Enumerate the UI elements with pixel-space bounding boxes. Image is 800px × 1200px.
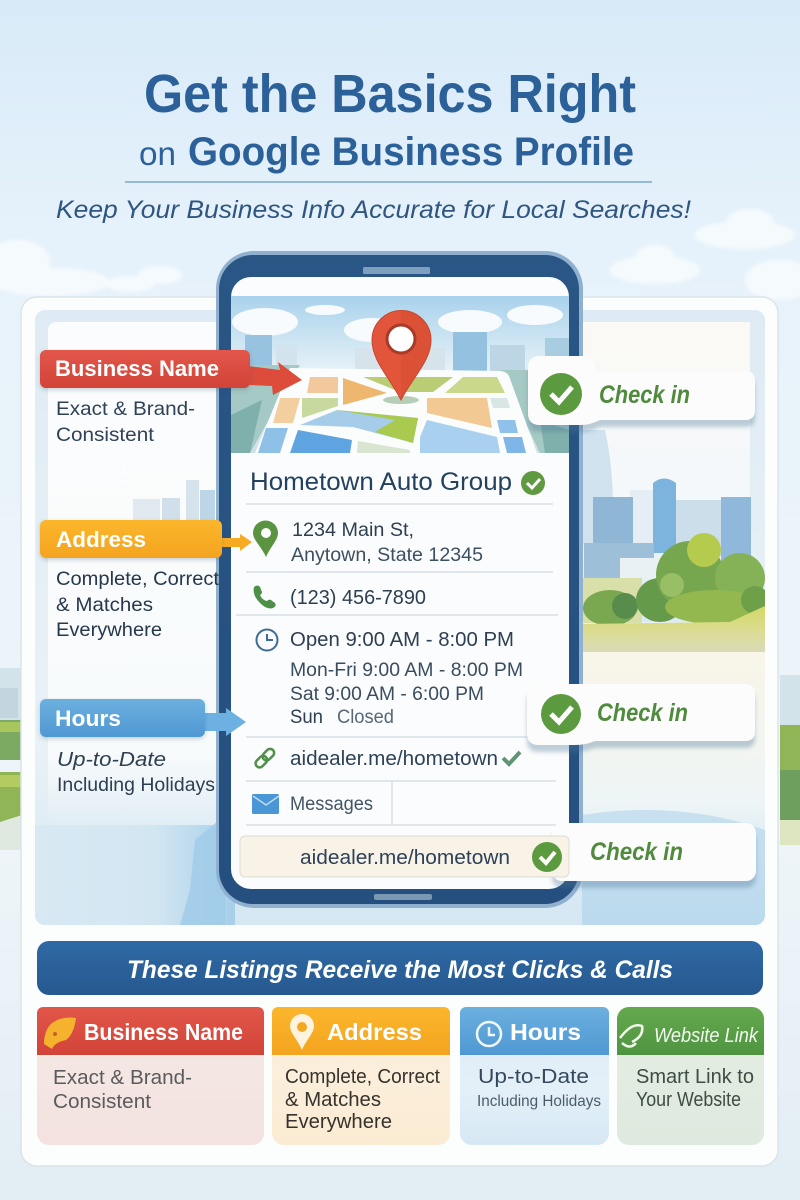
card: website link: Smart Link to (636, 1066, 754, 1088)
label: business name (40, 350, 302, 446)
card: address: Complete, Correct (285, 1066, 440, 1088)
messages row: Messages (290, 794, 373, 815)
label: business name: Consistent (56, 424, 155, 446)
card: address (272, 1007, 450, 1145)
phone row: (123) 456-7890 (290, 587, 426, 609)
label: address (40, 520, 252, 641)
label: hours: Hours (55, 706, 121, 731)
title: Google Business Profile (188, 130, 634, 174)
banner (37, 941, 763, 995)
label: address: Complete, Correct (56, 568, 220, 590)
business name row: Hometown Auto Group (250, 468, 512, 496)
label: hours: Including Holidays (57, 774, 215, 796)
messages row (252, 794, 373, 815)
title: on (139, 135, 176, 172)
card: hours: Hours (510, 1019, 581, 1045)
map pin (372, 310, 431, 404)
label: hours (40, 699, 246, 796)
card: business name: Business Name (84, 1019, 243, 1045)
card: business name: Exact & Brand- (53, 1067, 192, 1089)
label: address: Everywhere (56, 619, 162, 641)
subtitle: Keep Your Business Info Accurate for Local Searches! (56, 196, 691, 224)
main white card (21, 297, 778, 1166)
phone home bar (374, 894, 432, 900)
label: address: Address (56, 527, 146, 552)
right city (582, 430, 751, 580)
row dividers (236, 504, 558, 825)
card: website link: Website Link (654, 1025, 759, 1047)
callout: check in 1 (528, 356, 755, 425)
card: website link (617, 1007, 764, 1145)
background clouds (0, 209, 800, 300)
url bar: aidealer.me/hometown (300, 847, 510, 869)
hours row: Closed (337, 707, 394, 728)
left faint city (133, 480, 215, 520)
icon: address pin (253, 520, 278, 557)
callout: check in 1: Check in (599, 381, 690, 409)
phone speaker (363, 267, 430, 274)
left white backing (48, 322, 216, 793)
title divider (125, 181, 652, 183)
map blocks (258, 377, 526, 453)
icon: link (620, 1025, 642, 1046)
card: address: & Matches (285, 1089, 381, 1111)
label: business name: Business Name (55, 356, 219, 381)
hours row: Mon-Fri 9:00 AM - 8:00 PM (290, 660, 523, 681)
right top backing (582, 322, 750, 622)
phone screen (231, 277, 569, 889)
right lower wash (582, 810, 765, 925)
hours row: Sun (290, 707, 323, 728)
card: website link: Your Website (636, 1089, 741, 1111)
background edge landscape right (780, 675, 800, 845)
icon: phone (254, 586, 276, 608)
hours row (256, 629, 523, 728)
card: business name (37, 1007, 264, 1145)
right meadow (582, 578, 642, 623)
icon: clock (477, 1022, 501, 1046)
right lower backing (582, 652, 765, 925)
map illustration (231, 296, 569, 453)
title (139, 64, 636, 174)
banner: These Listings Receive the Most Clicks & Calls (127, 956, 673, 984)
callout: check in 3 (552, 823, 756, 881)
title: Get the Basics Right (144, 64, 636, 124)
label: address: & Matches (56, 594, 153, 616)
label: hours: Up-to-Date (57, 749, 166, 771)
card: hours: Including Holidays (477, 1093, 601, 1110)
address row (253, 519, 483, 566)
icon: envelope (252, 794, 279, 814)
phone (216, 251, 583, 908)
hours row: Sat 9:00 AM - 6:00 PM (290, 684, 484, 705)
illustrated inner panel (35, 310, 769, 925)
icon: tag (44, 1018, 76, 1049)
callout: check in 3: Check in (590, 838, 683, 866)
address row: 1234 Main St, (292, 519, 414, 541)
card: business name: Consistent (53, 1091, 151, 1113)
icon: link (254, 747, 276, 769)
card: address: Everywhere (285, 1111, 392, 1133)
callout: check in 2: Check in (597, 699, 688, 727)
label: business name: Exact & Brand- (56, 398, 195, 420)
website row: aidealer.me/hometown (290, 748, 498, 770)
right lawn (582, 606, 765, 652)
card: hours (460, 1007, 609, 1145)
url bar (240, 836, 569, 877)
card: address: Address (327, 1019, 422, 1045)
address row: Anytown, State 12345 (291, 544, 483, 566)
card: hours: Up-to-Date (478, 1066, 589, 1088)
icon: clock (256, 630, 278, 650)
left wash (35, 825, 235, 925)
hours row: Open 9:00 AM - 8:00 PM (290, 629, 514, 651)
callout: check in 2 (527, 684, 755, 745)
icon: pin (290, 1014, 314, 1050)
wash blotch near phone (180, 815, 225, 925)
right trees (583, 533, 769, 626)
phone frame (216, 251, 583, 908)
background edge landscape left (0, 668, 22, 850)
